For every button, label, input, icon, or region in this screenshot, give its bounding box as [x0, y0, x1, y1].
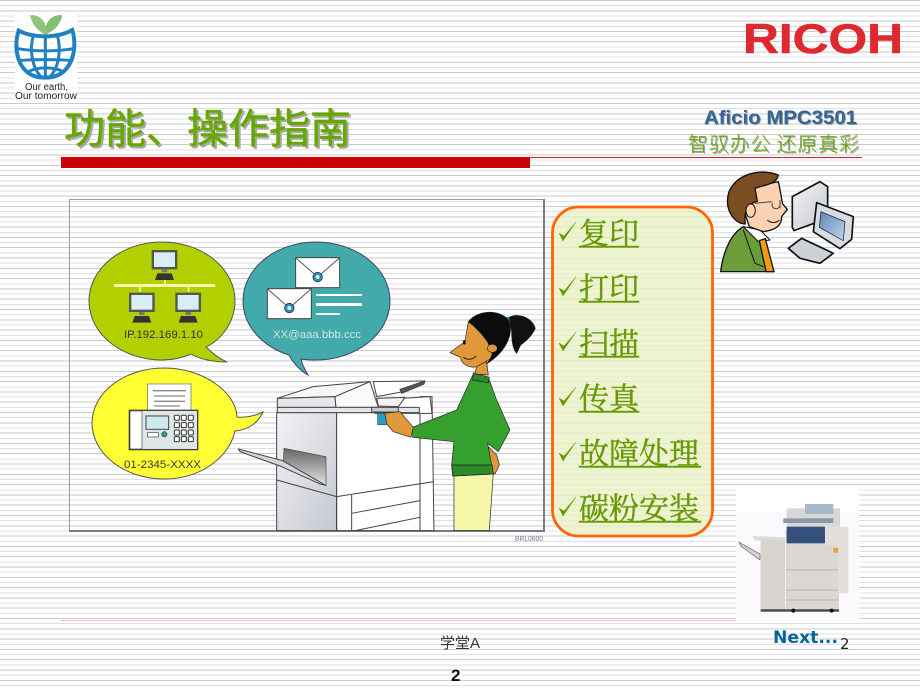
logo: our earth our tomorrow: [15, 14, 78, 102]
logo: our earth our tomorrow: Our tomorrow: [15, 91, 78, 102]
footer label: 学堂A: [440, 635, 480, 652]
ponytail band: [505, 317, 513, 329]
bubble: network: [89, 242, 235, 362]
slide number small: 2: [840, 635, 850, 653]
illustration frame: [69, 199, 545, 532]
left hand on hip: [488, 447, 499, 474]
model name: Aficio MPC3501: [704, 108, 857, 129]
item: troubleshooting: 故障处理: [579, 429, 699, 473]
bubble: email: [243, 242, 390, 375]
title rule: [61, 157, 862, 168]
next link: Next...: [773, 628, 838, 648]
icon: fax machine: [129, 384, 198, 450]
bubble: fax: [92, 368, 263, 479]
item: print: 打印: [579, 264, 639, 308]
hand: [385, 412, 413, 437]
icon: network computers: [114, 250, 215, 323]
person: [385, 312, 535, 531]
item: scan: 扫描: [579, 319, 639, 363]
footer rule: [61, 620, 736, 621]
icon: man at computer: [721, 172, 853, 272]
item: fax: 传真: [579, 374, 640, 418]
product photo: [736, 487, 859, 622]
item: toner installation: 碳粉安装: [579, 484, 699, 528]
bubble: network: IP.192.169.1.10: [124, 329, 203, 341]
figure code: BRL0600: [515, 536, 543, 543]
face: [450, 322, 495, 367]
slogan: 智驭办公 还原真彩: [688, 128, 859, 157]
brand logo: RICOH: RICOH: [743, 15, 903, 62]
ponytail: [509, 315, 535, 353]
trousers: [454, 473, 493, 531]
neck: [475, 362, 488, 375]
bubble: fax: 01-2345-XXXX: [124, 459, 202, 471]
icon: envelopes: [267, 258, 340, 319]
page number: 2: [451, 666, 460, 685]
item: copy: 复印: [579, 209, 639, 253]
panel: function links: [552, 207, 712, 536]
title: 功能、操作指南: [64, 95, 351, 155]
bubble: email: XX@aaa.bbb.ccc: [273, 329, 362, 341]
logo: our earth our tomorrow: Our earth,: [25, 82, 68, 93]
hair: [468, 312, 510, 364]
sweater: [413, 374, 510, 476]
copier: [238, 381, 434, 531]
